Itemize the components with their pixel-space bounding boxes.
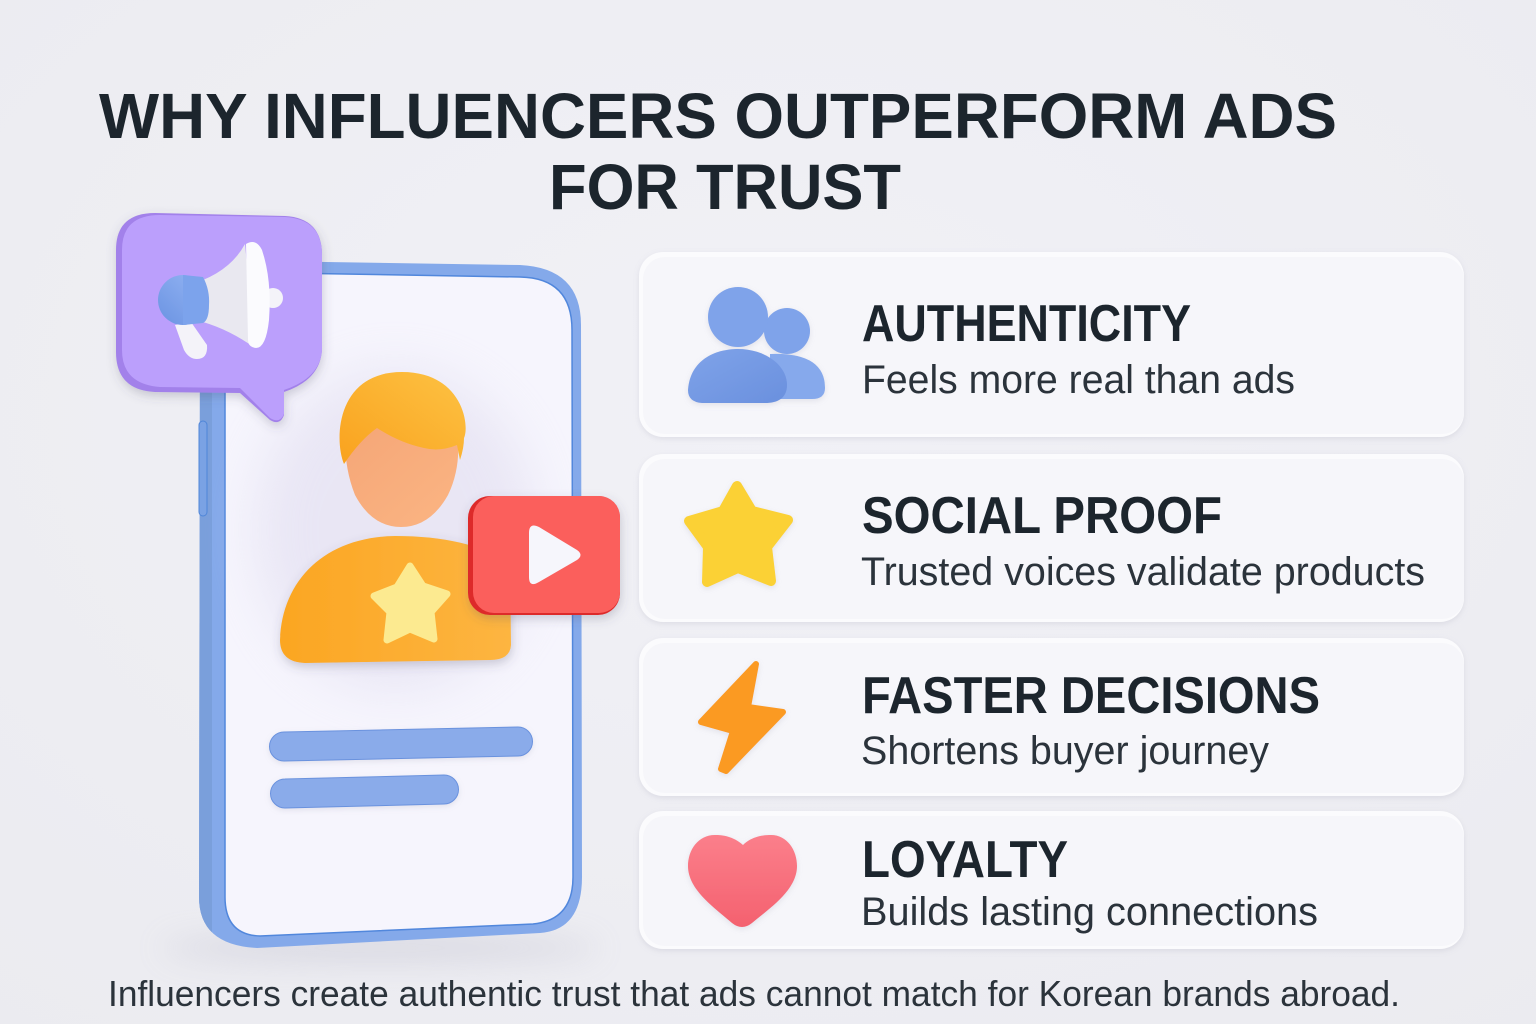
panel: loyalty — [639, 811, 1464, 949]
screen soft shadow — [255, 370, 535, 690]
description: faster decisions: Shortens buyer journey — [861, 729, 1269, 773]
heading: authenticity: AUTHENTICITY — [862, 295, 1191, 353]
description: social proof: Trusted voices validate products — [861, 550, 1425, 594]
face — [345, 427, 458, 527]
description: loyalty: Builds lasting connections — [861, 890, 1318, 934]
heading: faster decisions: FASTER DECISIONS — [862, 667, 1320, 725]
megaphone mouthpiece — [158, 275, 208, 325]
influencer avatar — [280, 372, 511, 663]
text line 1 — [270, 727, 532, 761]
icon: lightning bolt — [701, 664, 783, 771]
panel: faster decisions — [639, 638, 1464, 796]
video play badge — [468, 496, 620, 615]
description: authenticity: Feels more real than ads — [862, 358, 1295, 402]
phone illustration — [116, 213, 620, 958]
panel: authenticity — [639, 252, 1464, 437]
megaphone bell — [203, 244, 255, 348]
icon: star — [689, 486, 788, 582]
shirt star — [374, 566, 447, 640]
footer caption: Influencers create authentic trust that ads cannot match for Korean brands abroad. — [108, 973, 1400, 1014]
panel: social proof — [639, 454, 1464, 622]
heading: loyalty: LOYALTY — [862, 831, 1068, 889]
megaphone speech bubble — [116, 213, 322, 422]
heading: social proof: SOCIAL PROOF — [862, 487, 1222, 545]
title — [99, 80, 1337, 223]
icon: heart — [688, 835, 797, 927]
text line 2 — [270, 775, 458, 808]
title: FOR TRUST — [549, 151, 901, 223]
hair — [340, 372, 466, 464]
phone body — [198, 250, 582, 950]
title: WHY INFLUENCERS OUTPERFORM ADS — [99, 80, 1337, 152]
body — [280, 536, 511, 663]
megaphone handle — [175, 322, 207, 359]
side button — [199, 421, 207, 516]
icon: people — [688, 287, 825, 403]
